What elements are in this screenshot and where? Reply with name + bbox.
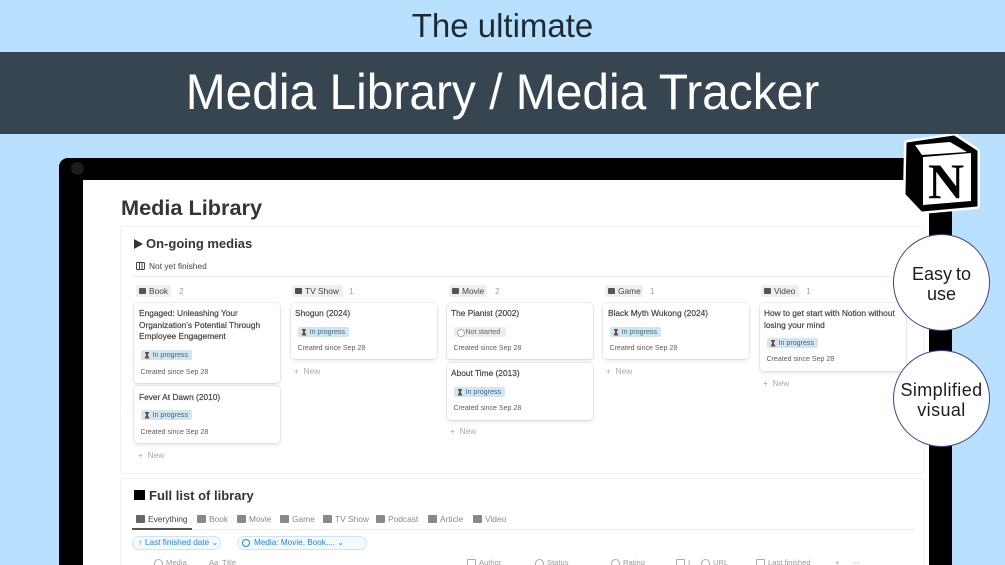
- card: How to get start: losing your mind: [764, 320, 825, 330]
- column: Book: [136, 285, 184, 297]
- card: Shogun: In progress: [310, 328, 345, 336]
- badge: Easy to use: [893, 234, 990, 331]
- webcam: [71, 162, 84, 175]
- active tab underline: [132, 528, 192, 530]
- column: TV Show: [292, 285, 354, 297]
- tag: Video: Video: [774, 286, 795, 296]
- board view label: Not yet finished: [149, 261, 207, 271]
- tab: Book: [197, 514, 228, 524]
- card: About Time: About Time (2013): [451, 368, 520, 378]
- icon: board: [136, 262, 145, 270]
- card: How to get start: How to get start with Notion without: [764, 308, 895, 318]
- icon: select: [242, 539, 250, 547]
- tag: Movie: [449, 285, 487, 297]
- heading: full list of library: Full list of library: [149, 488, 254, 503]
- page title: Media Library: [121, 195, 262, 220]
- card: The Pianist: The Pianist (2002): [451, 308, 519, 318]
- card: About Time: Created since Sep 28: [454, 405, 521, 412]
- title: The ultimate: The ultimate: [412, 7, 593, 44]
- card: Shogun: Created since Sep 28: [298, 345, 365, 352]
- column: URL: [701, 558, 728, 565]
- tab: Article: [428, 514, 463, 524]
- tag: Game: [605, 285, 643, 297]
- badge: Easy to use: use: [927, 284, 956, 304]
- count: 2: [495, 286, 500, 296]
- column: Rating: [611, 558, 645, 565]
- card: Engaged: Created since Sep 28: [140, 369, 208, 376]
- card: The Pianist: [447, 303, 593, 359]
- tab: Game: Game: [292, 514, 315, 524]
- card: Engaged: Engaged: Unleashing Your: [139, 308, 238, 318]
- icon: up arrow: ↑: [138, 538, 142, 547]
- tag: Book: Book: [149, 286, 168, 296]
- count: 1: [806, 286, 811, 296]
- count: 1: [650, 286, 655, 296]
- card: Fever At Dawn: In progress: [152, 411, 188, 419]
- badge: Easy to use: Easy to: [912, 264, 971, 284]
- card: About Time: In progress: [466, 388, 501, 396]
- card: Engaged: Employee Engagement: [139, 331, 226, 341]
- tag: TV Show: TV Show: [305, 286, 339, 296]
- banner heading: Media Library / Media Tracker: [186, 64, 819, 120]
- tab: Book: Book: [209, 514, 228, 524]
- heading: on-going medias: On-going medias: [146, 236, 252, 251]
- card: About Time: [447, 363, 593, 420]
- card: Engaged: [134, 303, 280, 383]
- column: Video: [761, 285, 811, 297]
- card: Black Myth Wukong: Black Myth Wukong (2024): [608, 308, 708, 318]
- card: Engaged: Organization's Potential Through: [139, 320, 260, 330]
- card: Fever At Dawn: [134, 386, 280, 443]
- new: Book: + New: [138, 450, 164, 460]
- tag: Video: [761, 285, 799, 297]
- icon: Notion logo: [903, 134, 980, 214]
- card: Fever At Dawn: Created since Sep 28: [140, 429, 208, 436]
- card: Black Myth Wukong: [603, 303, 749, 359]
- column: Game: [605, 285, 655, 297]
- card: How to get start: [760, 303, 906, 371]
- card: Fever At Dawn: Fever At Dawn (2010): [139, 392, 220, 402]
- card: Black Myth Wukong: In progress: [622, 328, 657, 336]
- tag: Movie: Movie: [462, 286, 484, 296]
- card: Engaged: In progress: [152, 351, 188, 359]
- panel: full list: [120, 478, 924, 565]
- tab: TV Show: TV Show: [335, 514, 369, 524]
- new: Movie: + New: [450, 426, 476, 436]
- tab: Movie: Movie: [249, 514, 271, 524]
- tab: Game: [280, 514, 315, 524]
- tab: Movie: [237, 514, 271, 524]
- count: 1: [349, 286, 354, 296]
- card: Shogun: [291, 303, 437, 359]
- card: The Pianist: Not started: [466, 328, 500, 336]
- banner: Media Library / Media Tracker: [0, 52, 1005, 134]
- table header: [154, 558, 860, 565]
- divider: [132, 276, 915, 277]
- new: Game: + New: [606, 366, 632, 376]
- card: Shogun: Shogun (2024): [295, 308, 350, 318]
- tag: Game: Game: [618, 286, 641, 296]
- tag: TV Show: [292, 285, 343, 297]
- card: How to get start: Created since Sep 28: [766, 356, 834, 363]
- column: Media: [154, 558, 187, 565]
- badge: Simplified visual: Simplified: [900, 380, 983, 400]
- filter: last finished date: Last finished date ⌄: [145, 538, 218, 547]
- icon: black square: [134, 490, 145, 500]
- tag: Book: [136, 285, 171, 297]
- badge: Simplified visual: [893, 350, 990, 447]
- column: Author: [467, 558, 502, 565]
- column: Status: [535, 558, 569, 565]
- card: How to get start: In progress: [778, 339, 814, 347]
- screen panel: Notion page: [83, 180, 929, 565]
- tab: Podcast: Podcast: [388, 514, 418, 524]
- card: Black Myth Wukong: Created since Sep 28: [610, 345, 677, 352]
- column: checkbox: [676, 558, 690, 565]
- card: The Pianist: Created since Sep 28: [454, 345, 521, 352]
- column: Movie: [449, 285, 500, 297]
- panel: on-going medias: [120, 226, 924, 474]
- new: Video: + New: [763, 378, 789, 388]
- tab: Video: Video: [485, 514, 506, 524]
- tab: Everything: Everything: [148, 514, 188, 524]
- tab: Article: Article: [440, 514, 463, 524]
- tab: Video: [473, 514, 506, 524]
- filter: media: [237, 536, 367, 550]
- icon: Notion logo: N: [928, 153, 964, 209]
- icon: triangle: [134, 239, 143, 249]
- filter: media: Media: Movie, Book,... ⌄: [254, 538, 344, 547]
- filter: last finished date: [132, 536, 221, 550]
- column: Title: [209, 558, 236, 565]
- new: TV Show: + New: [294, 366, 320, 376]
- badge: Simplified visual: visual: [917, 400, 966, 420]
- tabs row: [132, 510, 915, 530]
- count: 2: [179, 286, 184, 296]
- laptop frame: [59, 158, 952, 565]
